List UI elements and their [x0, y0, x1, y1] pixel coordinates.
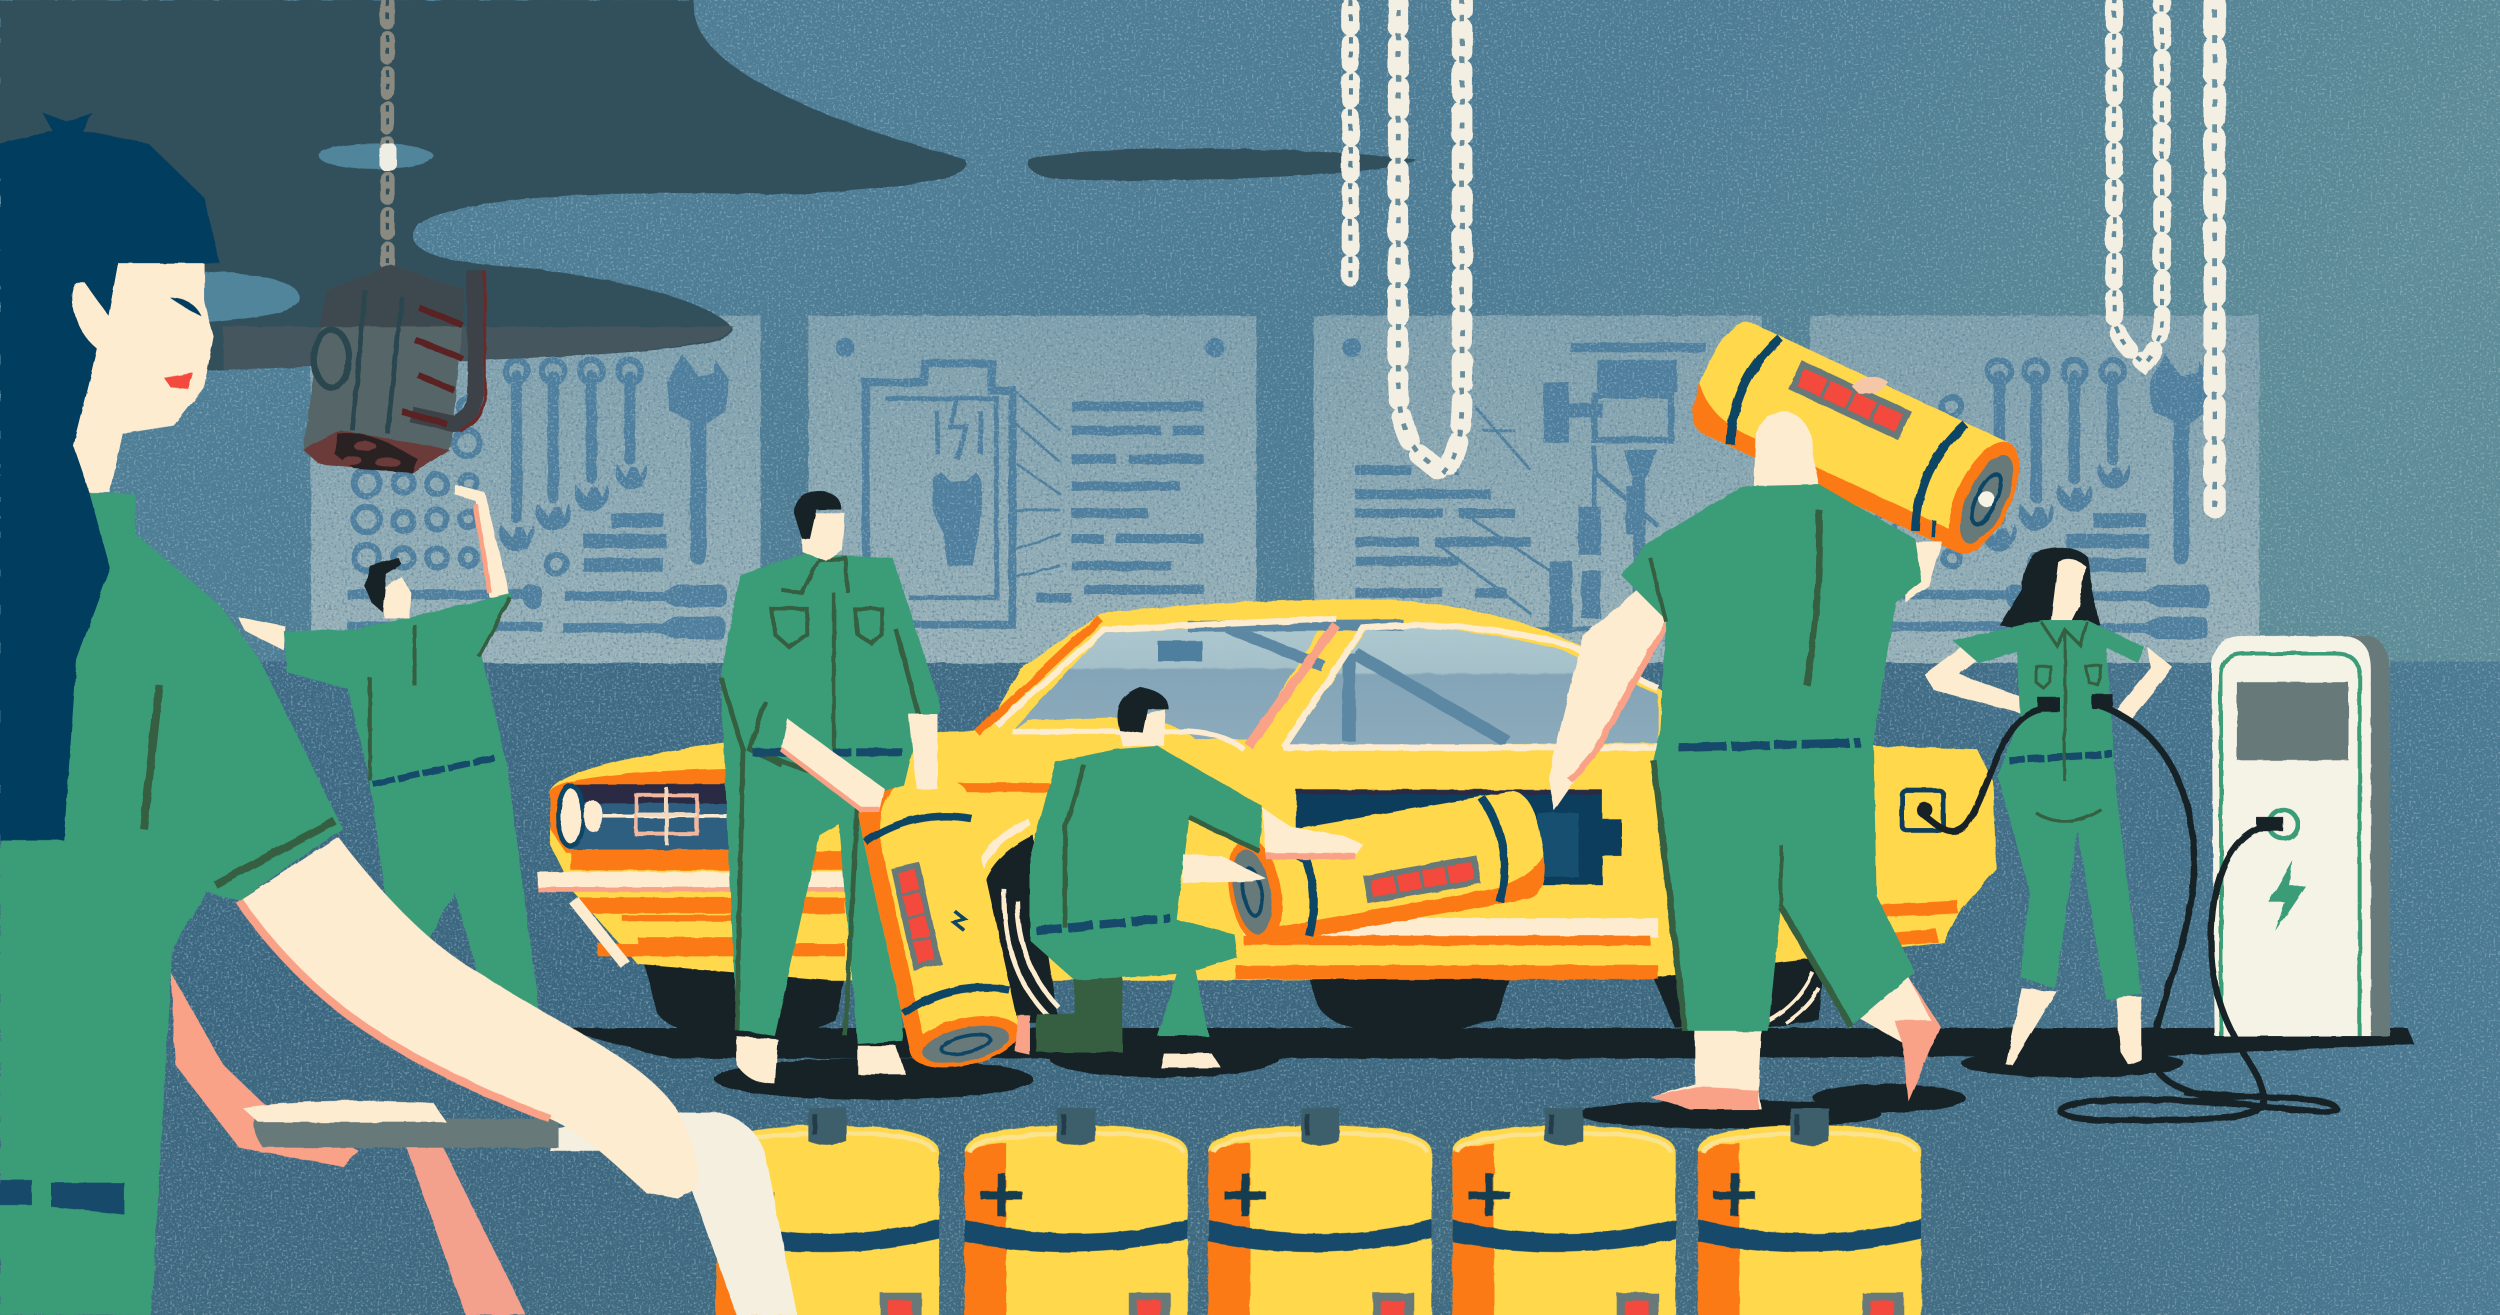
chain: middle looped [1398, 0, 1462, 473]
car body [550, 599, 1996, 980]
ceiling shadow [0, 0, 967, 383]
battery being installed [1220, 787, 1551, 950]
standing man's hands [781, 714, 938, 810]
panel: battery schematic [808, 316, 1256, 663]
window trim [977, 618, 1658, 749]
distant shadow streak [1028, 149, 1416, 181]
trolley pole, white [550, 1113, 797, 1315]
rear wheel rim [1768, 972, 1819, 1023]
kneeling man [1016, 687, 1363, 1068]
background: floor [0, 661, 2500, 1315]
battery 4 [1452, 1108, 1676, 1315]
car [537, 599, 1996, 1036]
panel: pegboard with tools, left [311, 316, 761, 663]
trolley pole, pink [407, 1148, 526, 1315]
eye [172, 298, 199, 314]
background: workshop wall [0, 0, 2500, 669]
engine block on chain [303, 265, 485, 473]
woman with cables [1924, 547, 2173, 1065]
body [0, 493, 343, 1315]
man with raised arm, background [238, 485, 540, 1020]
wheels [643, 939, 1826, 1036]
belt [0, 1180, 124, 1215]
background: floor lightening to the right [0, 661, 2500, 1315]
bumper and stripes [537, 787, 1958, 972]
row of large batteries [716, 1108, 1921, 1315]
ceiling shadow band over pegboard [223, 327, 733, 370]
bay edge [1296, 791, 1602, 794]
battery held upright [854, 773, 1025, 1076]
lips [164, 373, 193, 389]
neck, ear and face [72, 263, 214, 493]
panel: machine schematic [1314, 316, 1762, 663]
sleeve and seam lines [143, 685, 335, 885]
chain: right looped [2114, 0, 2162, 363]
arm shading [239, 901, 550, 1119]
front wheel in arch [973, 822, 1059, 1023]
charging station [2211, 636, 2390, 1036]
battery bay opening [1296, 794, 1621, 885]
standing man holding battery [721, 491, 941, 1084]
chain: right long [2208, 0, 2222, 507]
front arm [239, 837, 698, 1199]
charging cables [1921, 701, 2336, 1121]
windshield [1012, 623, 1323, 740]
chain: middle short [1345, 0, 1356, 284]
battery on shoulder [1681, 314, 2034, 564]
battery 5 [1698, 1108, 1921, 1315]
big man carrying battery [1548, 377, 1942, 1109]
hair [0, 128, 220, 840]
battery 3 [1209, 1108, 1432, 1315]
chain: dark hanging chain [379, 0, 397, 263]
handle grip [242, 1101, 446, 1122]
charge port [1902, 791, 1944, 830]
battery 2 [965, 1108, 1188, 1315]
side window [1288, 628, 1658, 746]
headlight and grille [550, 768, 749, 853]
battery 1 [716, 1108, 939, 1315]
hair bow [43, 113, 92, 134]
floor shadow under car [558, 1028, 2414, 1129]
window struts [1188, 625, 1507, 741]
trolley handle [254, 1119, 558, 1148]
panel: pegboard with tools, right [1810, 316, 2259, 663]
back arm [171, 972, 359, 1167]
panels: pegboards and schematics [311, 316, 2259, 663]
foreground woman pushing trolley [0, 113, 797, 1315]
